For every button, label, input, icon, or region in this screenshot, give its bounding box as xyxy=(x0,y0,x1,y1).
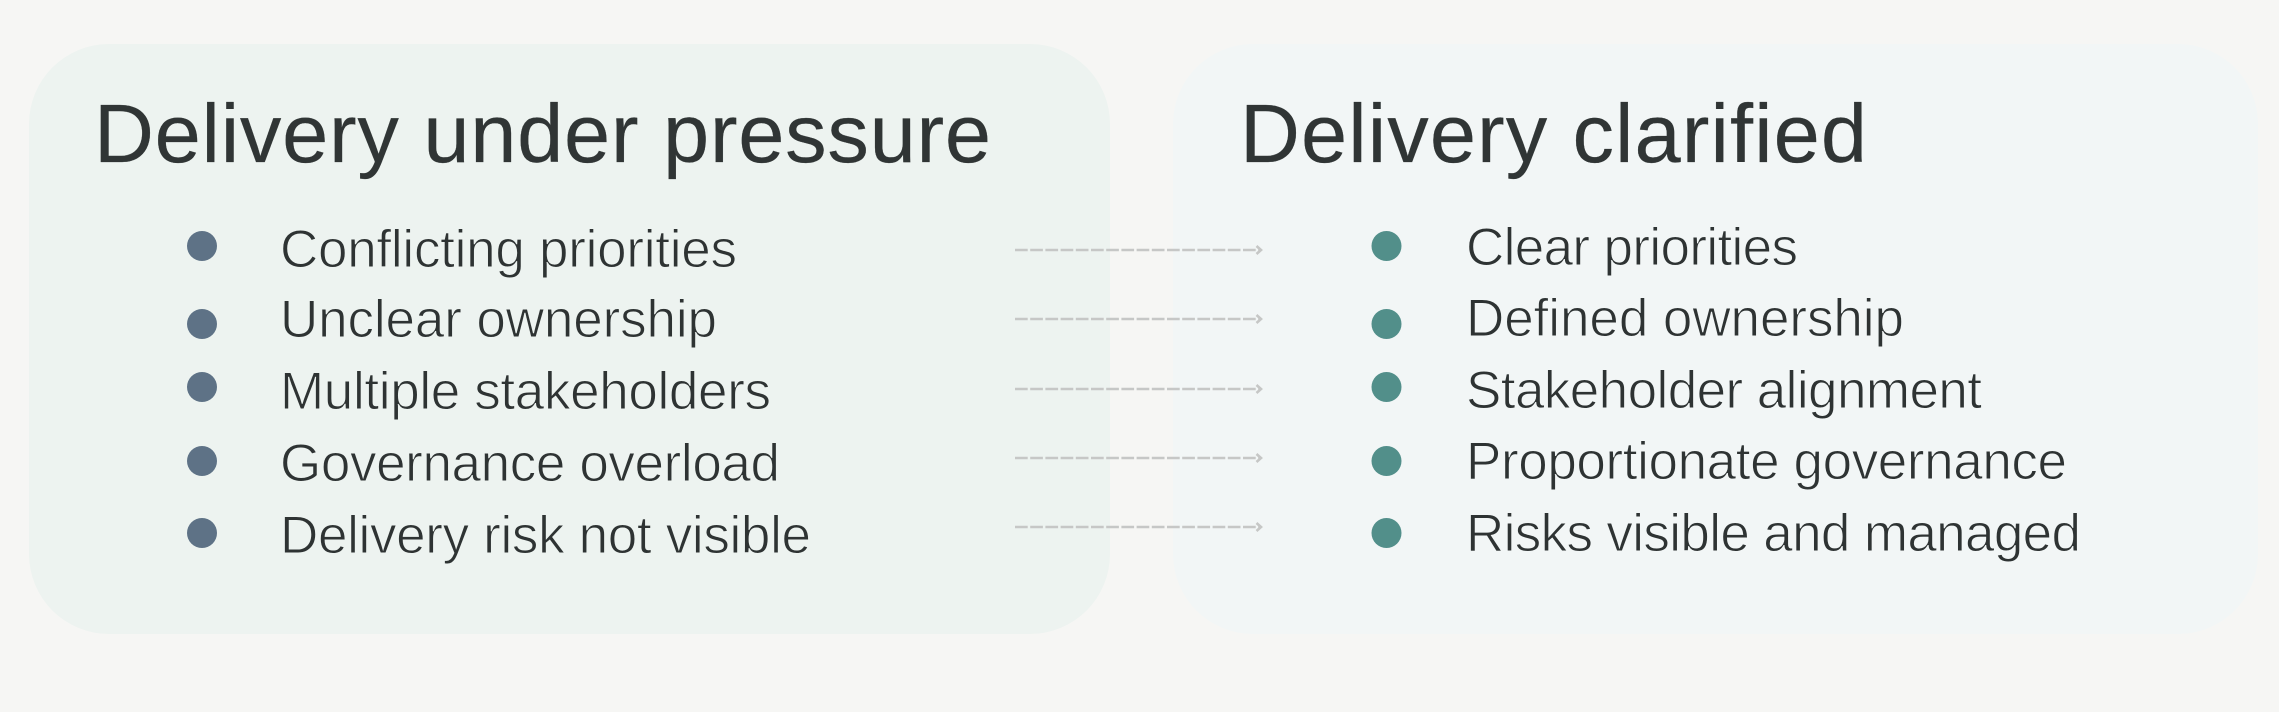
list: clarified items: Proportionate governance xyxy=(1466,432,2067,491)
arrow: risk xyxy=(1015,523,1261,531)
arrow: governance xyxy=(1015,454,1261,462)
list: clarified items xyxy=(1372,218,2081,563)
list: clarified items: Stakeholder alignment xyxy=(1466,361,1982,420)
panel: delivery clarified xyxy=(1173,44,2258,634)
panel: delivery under pressure xyxy=(29,44,1110,634)
list: pressure items: Governance overload xyxy=(280,434,780,493)
list: pressure items: Conflicting priorities xyxy=(280,220,737,279)
heading: delivery clarified: Delivery clarified xyxy=(1240,87,1867,180)
heading: delivery under pressure: Delivery under pressure xyxy=(94,87,991,180)
arrows: pressure to clarified xyxy=(1015,246,1261,531)
list: pressure items: Multiple stakeholders xyxy=(280,362,771,421)
arrow: stakeholders xyxy=(1015,385,1261,393)
arrow: priorities xyxy=(1015,246,1261,254)
list: clarified items: Defined ownership xyxy=(1466,289,1904,348)
list: clarified items: Clear priorities xyxy=(1466,218,1798,277)
list: clarified items: Risks visible and managed xyxy=(1466,504,2081,563)
list: pressure items: Unclear ownership xyxy=(280,290,717,349)
arrow: ownership xyxy=(1015,315,1261,323)
list: pressure items: Delivery risk not visible xyxy=(280,506,811,565)
list: pressure items xyxy=(187,220,811,565)
